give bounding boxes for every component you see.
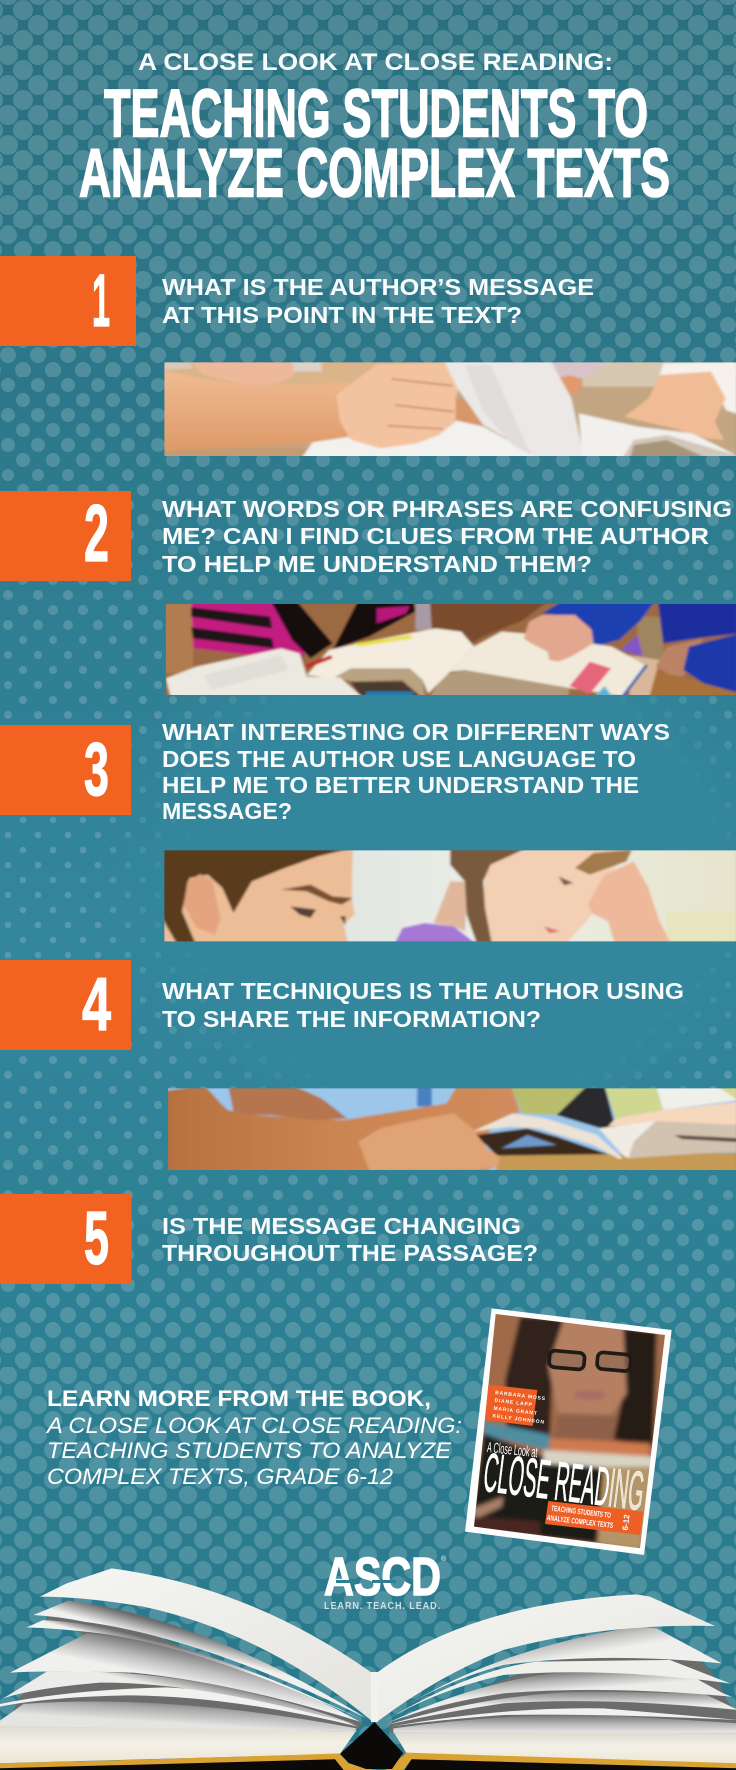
step 5 question: IS THE MESSAGE CHANGING [162,1213,521,1239]
cover title: TEACHING STUDENTS TO [551,1504,611,1520]
step 4 question: TO SHARE THE INFORMATION? [162,1006,541,1032]
cover authors: BARBARA MOSS [495,1390,546,1402]
call to action text: TEACHING STUDENTS TO ANALYZE [47,1438,451,1463]
cover title: ANALYZE COMPLEX TEXTS [546,1513,614,1530]
ASCD logo: ® [441,1555,447,1563]
call to action text: COMPLEX TEXTS, GRADE 6-12 [47,1464,393,1489]
step 2 question: TO HELP ME UNDERSTAND THEM? [162,551,592,577]
photo: child's hands turning a book page [160,358,736,458]
step 1 number badge: 1 [92,259,110,342]
step 2 number badge [0,489,131,581]
book gutter [371,1672,378,1722]
step 3 question: MESSAGE? [162,798,292,824]
step 1 question: WHAT IS THE AUTHOR’S MESSAGE [162,274,594,300]
call to action text [45,1386,462,1489]
step 5 number badge [0,1194,132,1284]
ASCD logo: ASCD [324,1547,441,1607]
step 4 question: WHAT TECHNIQUES IS THE AUTHOR USING [162,978,684,1004]
left black base [0,1759,345,1770]
step 3 question: DOES THE AUTHOR USE LANGUAGE TO [162,746,636,772]
book cover [463,1308,672,1555]
step 5 question [162,1213,538,1266]
left fanned pages [0,1568,373,1732]
open book illustration [0,1568,736,1770]
cover title: 6-12 [621,1513,632,1531]
ASCD logo: LEARN. TEACH. LEAD. [324,1600,441,1612]
step 4 question [162,978,684,1032]
step 2 question: ME? CAN I FIND CLUES FROM THE AUTHOR [162,523,709,549]
cover title [481,1440,648,1531]
subtitle: A CLOSE LOOK AT CLOSE READING: [138,49,613,76]
photo: two students reading [160,848,736,946]
cover authors: KELLY JOHNSON [492,1413,545,1426]
step 3 question [162,719,670,824]
photo: children pointing at an open book [160,600,736,700]
step 2 question [162,496,732,577]
left half of book [0,1568,380,1770]
step 1 question [162,274,594,328]
step 3 number badge [0,725,131,815]
step 3 number badge: 3 [84,727,109,811]
cover authors: DIANE LAPP [494,1398,533,1408]
step 5 question: THROUGHOUT THE PASSAGE? [162,1240,538,1266]
left gold edge [0,1753,380,1770]
title block [79,49,670,212]
step 1 number badge [0,256,136,346]
call to action text: A CLOSE LOOK AT CLOSE READING: [45,1413,462,1438]
right page block [393,1732,736,1764]
right black base [403,1759,736,1770]
right gold edge [383,1753,736,1770]
spine triangle [340,1722,403,1769]
right half of book [376,1594,736,1770]
left page block [0,1725,357,1763]
step 4 number badge [0,960,131,1050]
step 2 question: WHAT WORDS OR PHRASES ARE CONFUSING [162,496,732,522]
step 2 number badge: 2 [84,489,109,579]
cover title: A Close Look at [486,1440,538,1461]
cover authors: MARIA GRANT [493,1406,538,1417]
step 4 number badge: 4 [82,962,111,1046]
step 3 question: WHAT INTERESTING OR DIFFERENT WAYS [162,719,670,745]
step 3 question: HELP ME TO BETTER UNDERSTAND THE [162,772,639,798]
right fanned pages [376,1594,736,1733]
step 5 number badge: 5 [84,1196,109,1280]
step 1 question: AT THIS POINT IN THE TEXT? [162,302,522,328]
cover authors [492,1390,546,1426]
call to action text: LEARN MORE FROM THE BOOK, [47,1386,431,1411]
photo: student arms resting beside open book [160,1085,736,1173]
